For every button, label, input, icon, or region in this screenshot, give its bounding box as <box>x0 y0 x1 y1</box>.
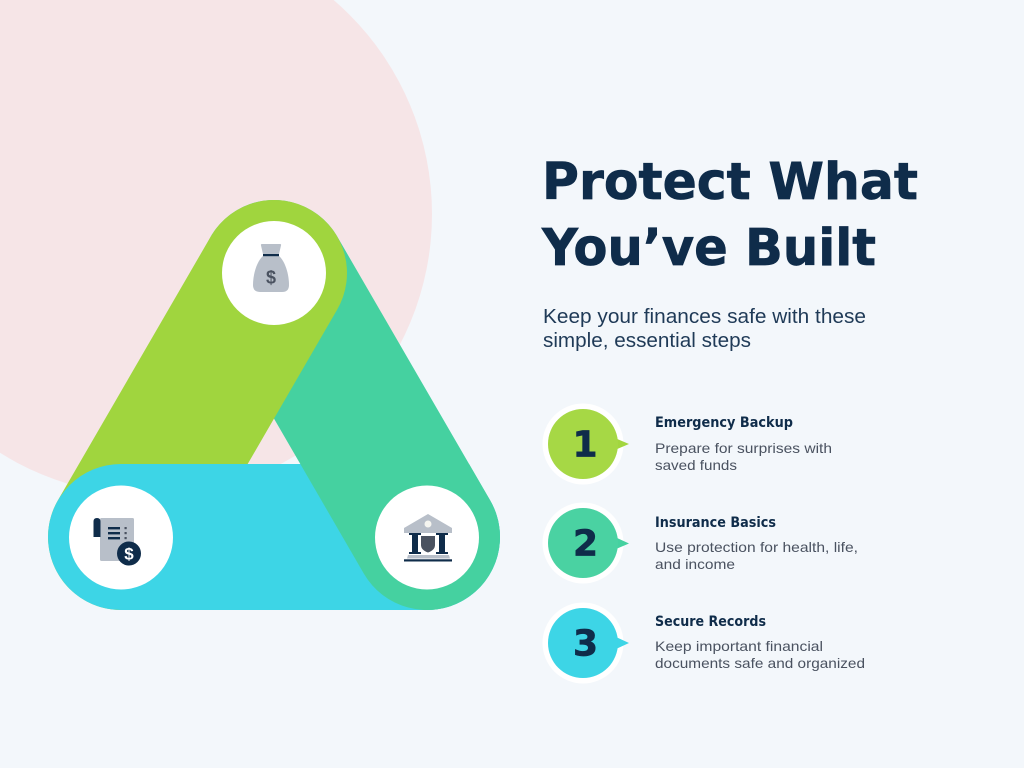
title <box>541 153 918 278</box>
step 3 badge <box>542 602 629 684</box>
step 1 text: Prepare for surprises with <box>655 440 832 456</box>
step 2 <box>542 502 858 584</box>
step 1 <box>542 404 832 484</box>
step 3 <box>542 602 865 684</box>
step 2 badge <box>542 502 629 584</box>
step 2 badge: 2 <box>573 524 598 564</box>
icon: money bag: $ <box>266 268 276 288</box>
step 3 text: Keep important financial <box>655 638 823 654</box>
icon: money bag <box>222 221 326 325</box>
band: cyan capsule <box>121 464 427 610</box>
subtitle: simple, essential steps <box>543 330 751 352</box>
step 3 badge: 3 <box>573 624 598 664</box>
band: teal capsule <box>274 273 427 537</box>
step 3 text <box>655 614 865 671</box>
title: Protect What <box>542 153 918 212</box>
band: teal capsule overlap <box>300 464 500 610</box>
triangle diagram <box>69 221 479 590</box>
step 3 text: documents safe and organized <box>655 655 865 671</box>
step 2 text <box>655 515 858 572</box>
step 2 text: and income <box>655 556 735 572</box>
subtitle <box>543 306 866 352</box>
step 1 badge: 1 <box>572 424 598 466</box>
step 1 text: saved funds <box>655 457 737 473</box>
icon: document with dollar <box>69 486 173 590</box>
background pink circle <box>0 0 432 496</box>
band: green capsule <box>121 273 274 537</box>
step 1 text <box>655 415 832 473</box>
step 1 text: Emergency Backup <box>655 415 793 431</box>
step 1 badge <box>542 404 629 484</box>
icon: document with dollar: $ <box>124 544 134 564</box>
step 2 text: Insurance Basics <box>655 515 776 531</box>
subtitle: Keep your finances safe with these <box>543 306 866 328</box>
step 3 text: Secure Records <box>655 614 766 630</box>
icon: bank with shield <box>375 486 479 590</box>
title: You’ve Built <box>541 219 876 278</box>
step 2 text: Use protection for health, life, <box>655 539 858 555</box>
